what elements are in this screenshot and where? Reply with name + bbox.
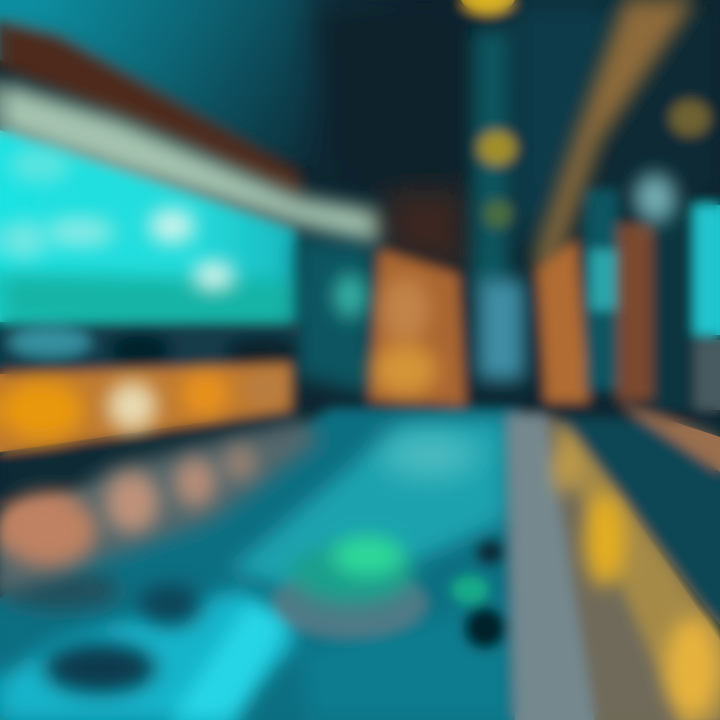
dark stools near table <box>452 538 507 650</box>
ceiling <box>0 0 720 420</box>
right wall band <box>620 404 720 472</box>
ceiling lights <box>461 0 710 228</box>
middle teal panel <box>295 235 375 395</box>
central blue column <box>474 30 524 380</box>
right teal panels <box>585 174 720 410</box>
right dark teal bench <box>562 418 720 625</box>
pale window header <box>0 82 380 245</box>
green table <box>274 536 426 637</box>
grey walkway <box>508 415 595 720</box>
teal panel glow <box>334 274 366 318</box>
dark shelf band <box>0 322 300 368</box>
salmon seating row <box>0 420 320 595</box>
right brown beam <box>535 0 695 285</box>
orange counter <box>0 364 290 452</box>
dark counter base <box>0 410 330 505</box>
brown ceiling beam <box>0 20 300 200</box>
floor <box>0 410 520 720</box>
right brown pillar lower <box>538 240 588 402</box>
central orange pillar <box>370 190 465 405</box>
cyan window panel <box>0 130 295 335</box>
shelf objects <box>8 326 298 366</box>
golden edge strip <box>545 415 720 720</box>
